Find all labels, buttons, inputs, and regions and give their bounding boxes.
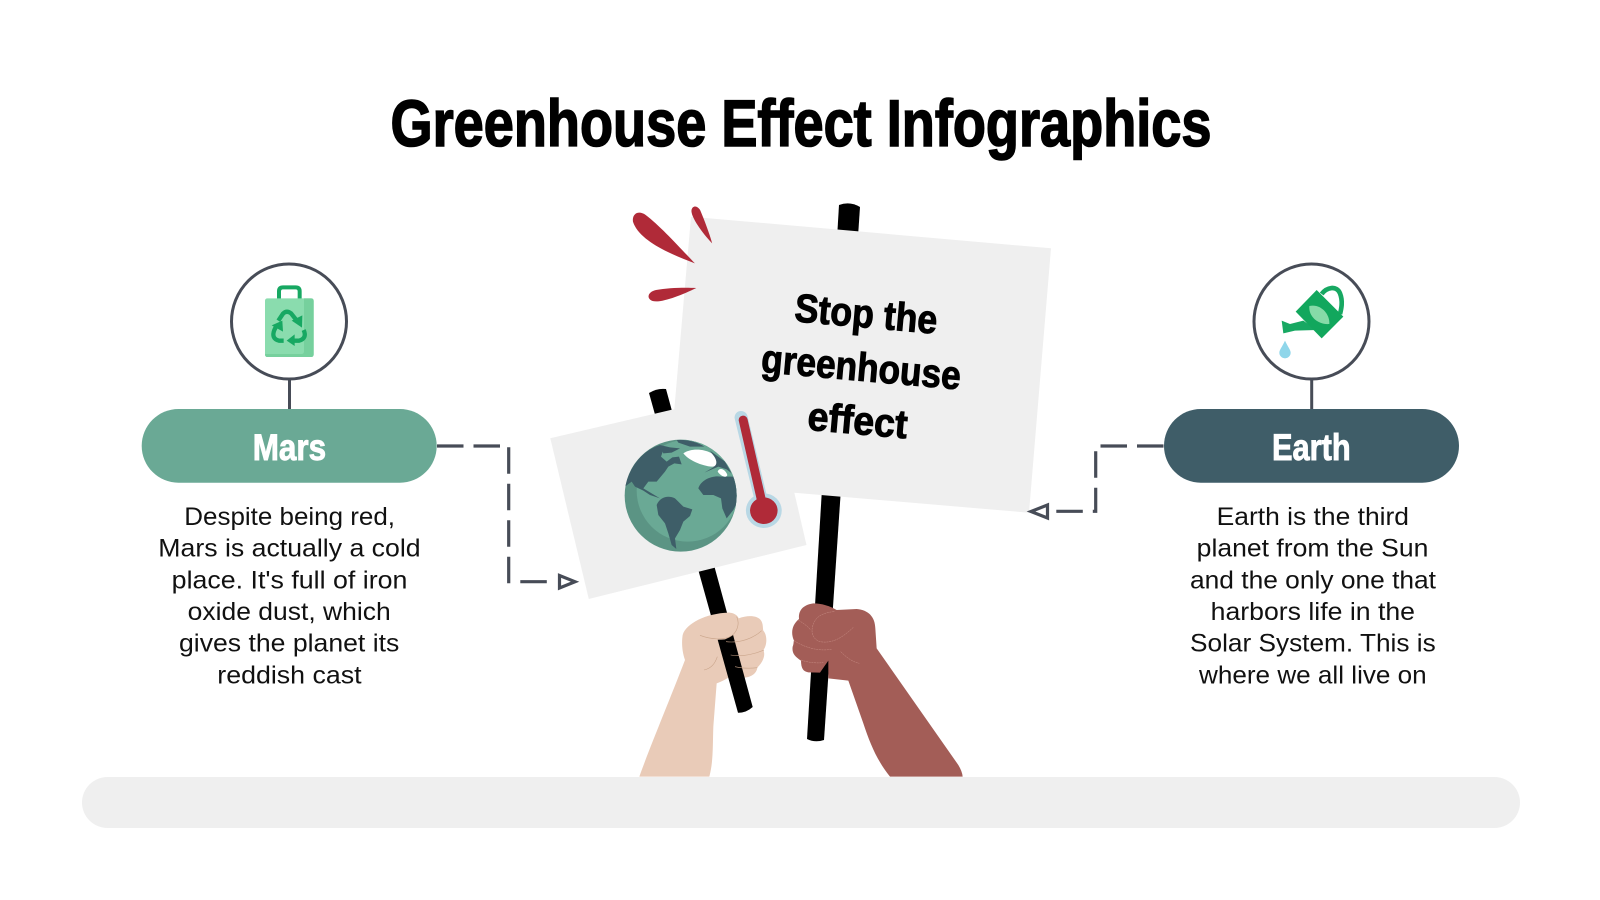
left hand thumb xyxy=(683,613,764,670)
text: Mars description: oxide dust, which xyxy=(188,598,391,626)
illustration: protest signs xyxy=(550,203,1051,777)
text: Earth description: where we all live on xyxy=(1198,661,1427,689)
text: Mars description xyxy=(158,503,421,689)
small sign pole xyxy=(649,389,753,713)
panel: Earth xyxy=(1031,264,1459,689)
sign text xyxy=(760,286,963,447)
text: Earth description: and the only one that xyxy=(1190,566,1436,594)
pill: Earth: Earth xyxy=(1272,427,1351,468)
text: Earth description: Solar System. This is xyxy=(1190,630,1436,658)
right hand xyxy=(792,603,963,777)
icon: recycle bag in circle xyxy=(232,264,346,409)
text: Earth description: harbors life in the xyxy=(1211,598,1415,626)
icon: thermometer xyxy=(741,417,782,528)
left hand palm and arm xyxy=(639,613,766,777)
text: Mars description: Mars is actually a cold xyxy=(158,535,421,563)
text: Mars description: reddish cast xyxy=(217,661,362,689)
panel: Mars xyxy=(142,264,575,689)
text: Earth description xyxy=(1190,503,1436,689)
ground bar xyxy=(82,777,1520,828)
arrow: Mars to small sign xyxy=(437,446,575,588)
text: Mars description: Despite being red, xyxy=(184,503,395,531)
icon: earth globe xyxy=(625,440,739,552)
pill: Mars: Mars xyxy=(253,427,326,468)
title: Greenhouse Effect Infographics xyxy=(390,86,1212,160)
text: Earth description: planet from the Sun xyxy=(1197,535,1428,563)
big sign pole xyxy=(807,203,860,741)
sign text: greenhouse xyxy=(760,337,963,398)
pill: Earth xyxy=(1164,409,1459,483)
text: Mars description: place. It's full of iron xyxy=(172,566,407,594)
arrow: Earth to big sign xyxy=(1031,446,1164,518)
red burst marks xyxy=(633,207,712,301)
sign text: effect xyxy=(806,395,909,447)
small sign board xyxy=(550,387,806,599)
pill: Mars xyxy=(142,409,437,483)
big sign board xyxy=(668,217,1051,513)
text: Mars description: gives the planet its xyxy=(179,630,399,658)
text: Earth description: Earth is the third xyxy=(1217,503,1409,531)
sign text: Stop the xyxy=(793,286,939,343)
icon: watering can in circle xyxy=(1254,264,1369,409)
